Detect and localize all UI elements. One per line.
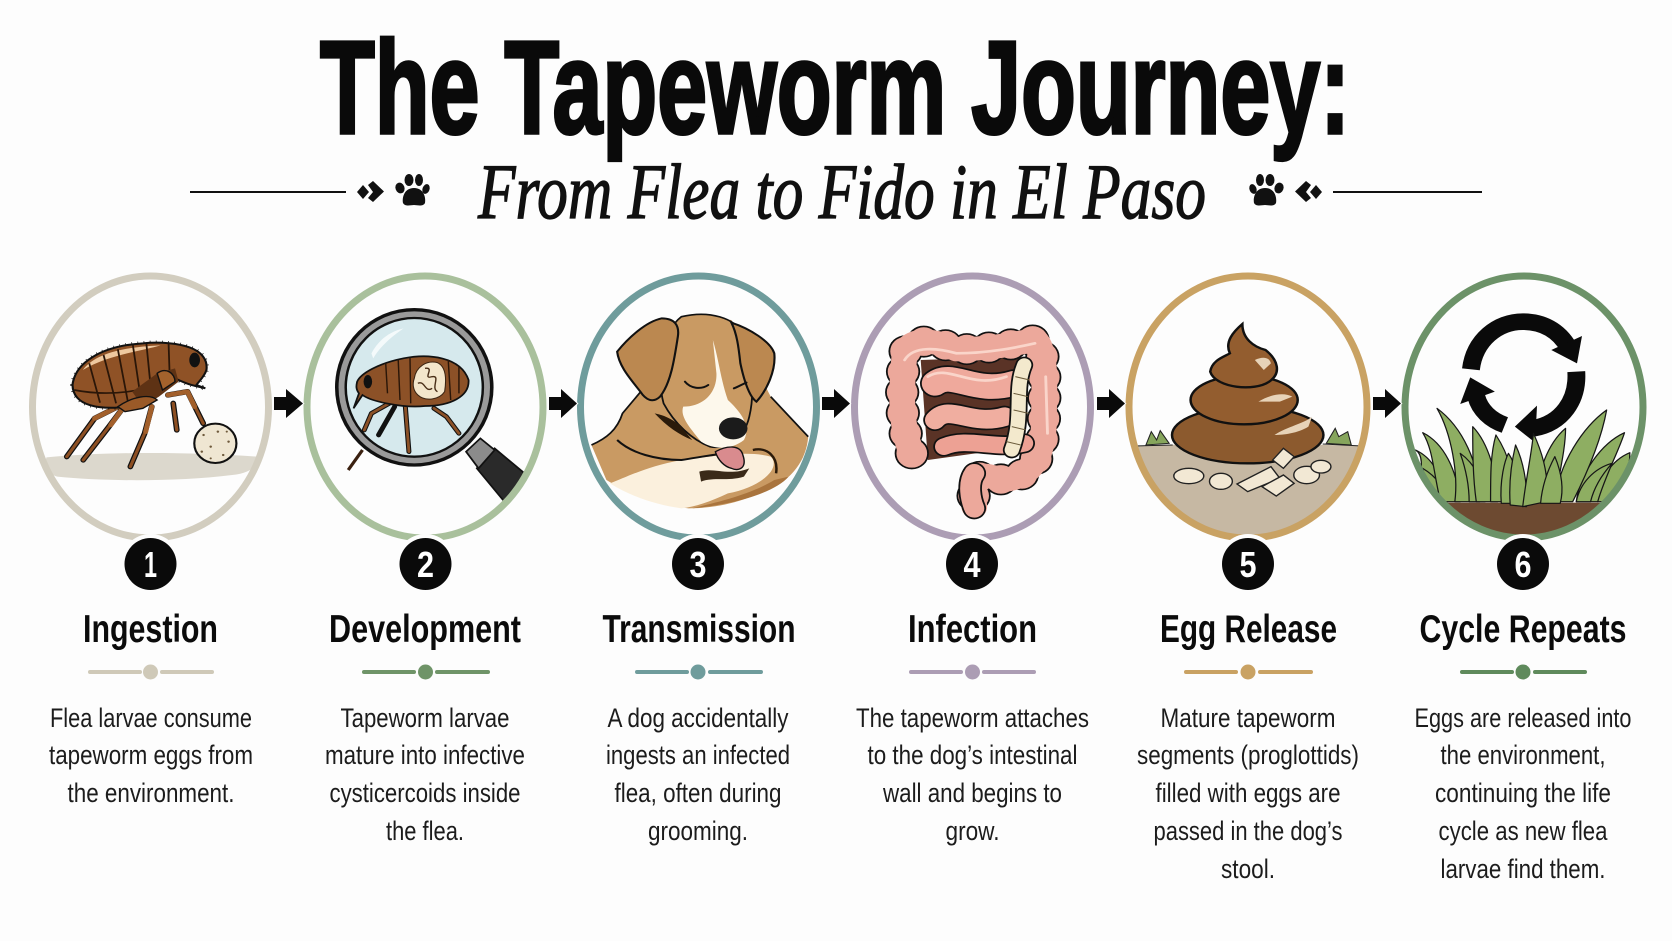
divider 5 (1184, 664, 1313, 680)
number badge 3 (668, 534, 728, 594)
description 2: mature into infective (325, 740, 525, 770)
description 6: larvae find them. (1440, 854, 1606, 884)
illustration: dog grooming (591, 314, 808, 508)
description 5: segments (proglottids) (1137, 740, 1359, 770)
illustration: magnifying glass with flea (335, 308, 529, 505)
illustration: intestines with tapeworm (902, 340, 1047, 508)
description 3: A dog accidentally (608, 703, 789, 733)
number badge 2 (396, 534, 456, 594)
oval frame 4 (854, 276, 1090, 538)
arrow 1 (274, 389, 303, 418)
left subtitle ornament (190, 174, 431, 206)
description 4: grow. (946, 816, 1000, 846)
number badge 5: 5 (1240, 544, 1256, 585)
number badge 3: 3 (690, 544, 706, 585)
description 1: the environment. (68, 778, 234, 808)
description 2 (325, 703, 525, 846)
description 5 (1137, 703, 1359, 884)
oval frame 3 (580, 276, 816, 538)
description 3: flea, often during (614, 778, 782, 808)
description 2: the flea. (386, 816, 464, 846)
divider 4 (909, 664, 1036, 680)
description 4 (856, 703, 1089, 846)
description 4: to the dog’s intestinal (868, 740, 1078, 770)
heading 2: Development (329, 608, 521, 651)
heading 5: Egg Release (1160, 608, 1337, 651)
number badge 6: 6 (1514, 544, 1532, 585)
number badge 1 (120, 534, 180, 594)
panel: step 1 ingestion (32, 276, 268, 808)
oval frame 6 (1405, 276, 1643, 538)
description 1: tapeworm eggs from (49, 740, 253, 770)
heading 1: Ingestion (83, 608, 218, 651)
divider 6 (1460, 664, 1587, 680)
description 2: cysticercoids inside (330, 778, 520, 808)
panel: step 4 infection (854, 276, 1090, 846)
illustration: stool with egg segments (1138, 321, 1358, 534)
description 4: wall and begins to (882, 778, 1062, 808)
description 6: continuing the life (1435, 778, 1611, 808)
heading 4: Infection (908, 608, 1037, 651)
description 6 (1414, 703, 1632, 884)
panel: step 5 egg release (1126, 276, 1369, 884)
divider 2 (362, 664, 490, 680)
arrow 5 (1373, 389, 1401, 418)
divider 1 (88, 664, 214, 680)
description 6: the environment, (1440, 740, 1606, 770)
description 2: Tapeworm larvae (340, 703, 510, 733)
heading 3: Transmission (602, 608, 796, 651)
number badge 6 (1493, 534, 1553, 594)
oval frame 2 (307, 276, 543, 538)
description 3 (606, 703, 790, 846)
description 3: grooming. (648, 816, 748, 846)
illustration: flea and egg (46, 343, 258, 480)
description 5: passed in the dog’s (1154, 816, 1342, 846)
number badge 2: 2 (417, 544, 434, 585)
description 5: stool. (1221, 854, 1275, 884)
oval frame 1 (32, 276, 268, 538)
description 5: Mature tapeworm (1160, 703, 1336, 733)
illustration: cycle arrows over grass (1415, 313, 1630, 534)
arrow 2 (549, 389, 577, 418)
arrow 4 (1097, 389, 1125, 418)
description 1 (49, 703, 253, 808)
right subtitle ornament (1248, 174, 1482, 206)
number badge 4 (942, 534, 1002, 594)
description 3: ingests an infected (606, 740, 790, 770)
panel: step 2 development (307, 276, 543, 846)
number badge 5 (1218, 534, 1278, 594)
divider 3 (635, 664, 763, 680)
number badge 1: 1 (144, 544, 157, 585)
description 4: The tapeworm attaches (856, 703, 1089, 733)
panel: step 3 transmission (580, 276, 816, 846)
description 6: Eggs are released into (1414, 703, 1632, 733)
description 1: Flea larvae consume (50, 703, 252, 733)
arrow 3 (822, 389, 850, 418)
description 6: cycle as new flea (1438, 816, 1608, 846)
panel: step 6 cycle repeats (1398, 276, 1648, 884)
oval frame 5 (1129, 276, 1367, 538)
subtitle: From Flea to Fido in El Paso (477, 148, 1206, 235)
description 5: filled with eggs are (1156, 778, 1340, 808)
number badge 4: 4 (964, 544, 980, 585)
